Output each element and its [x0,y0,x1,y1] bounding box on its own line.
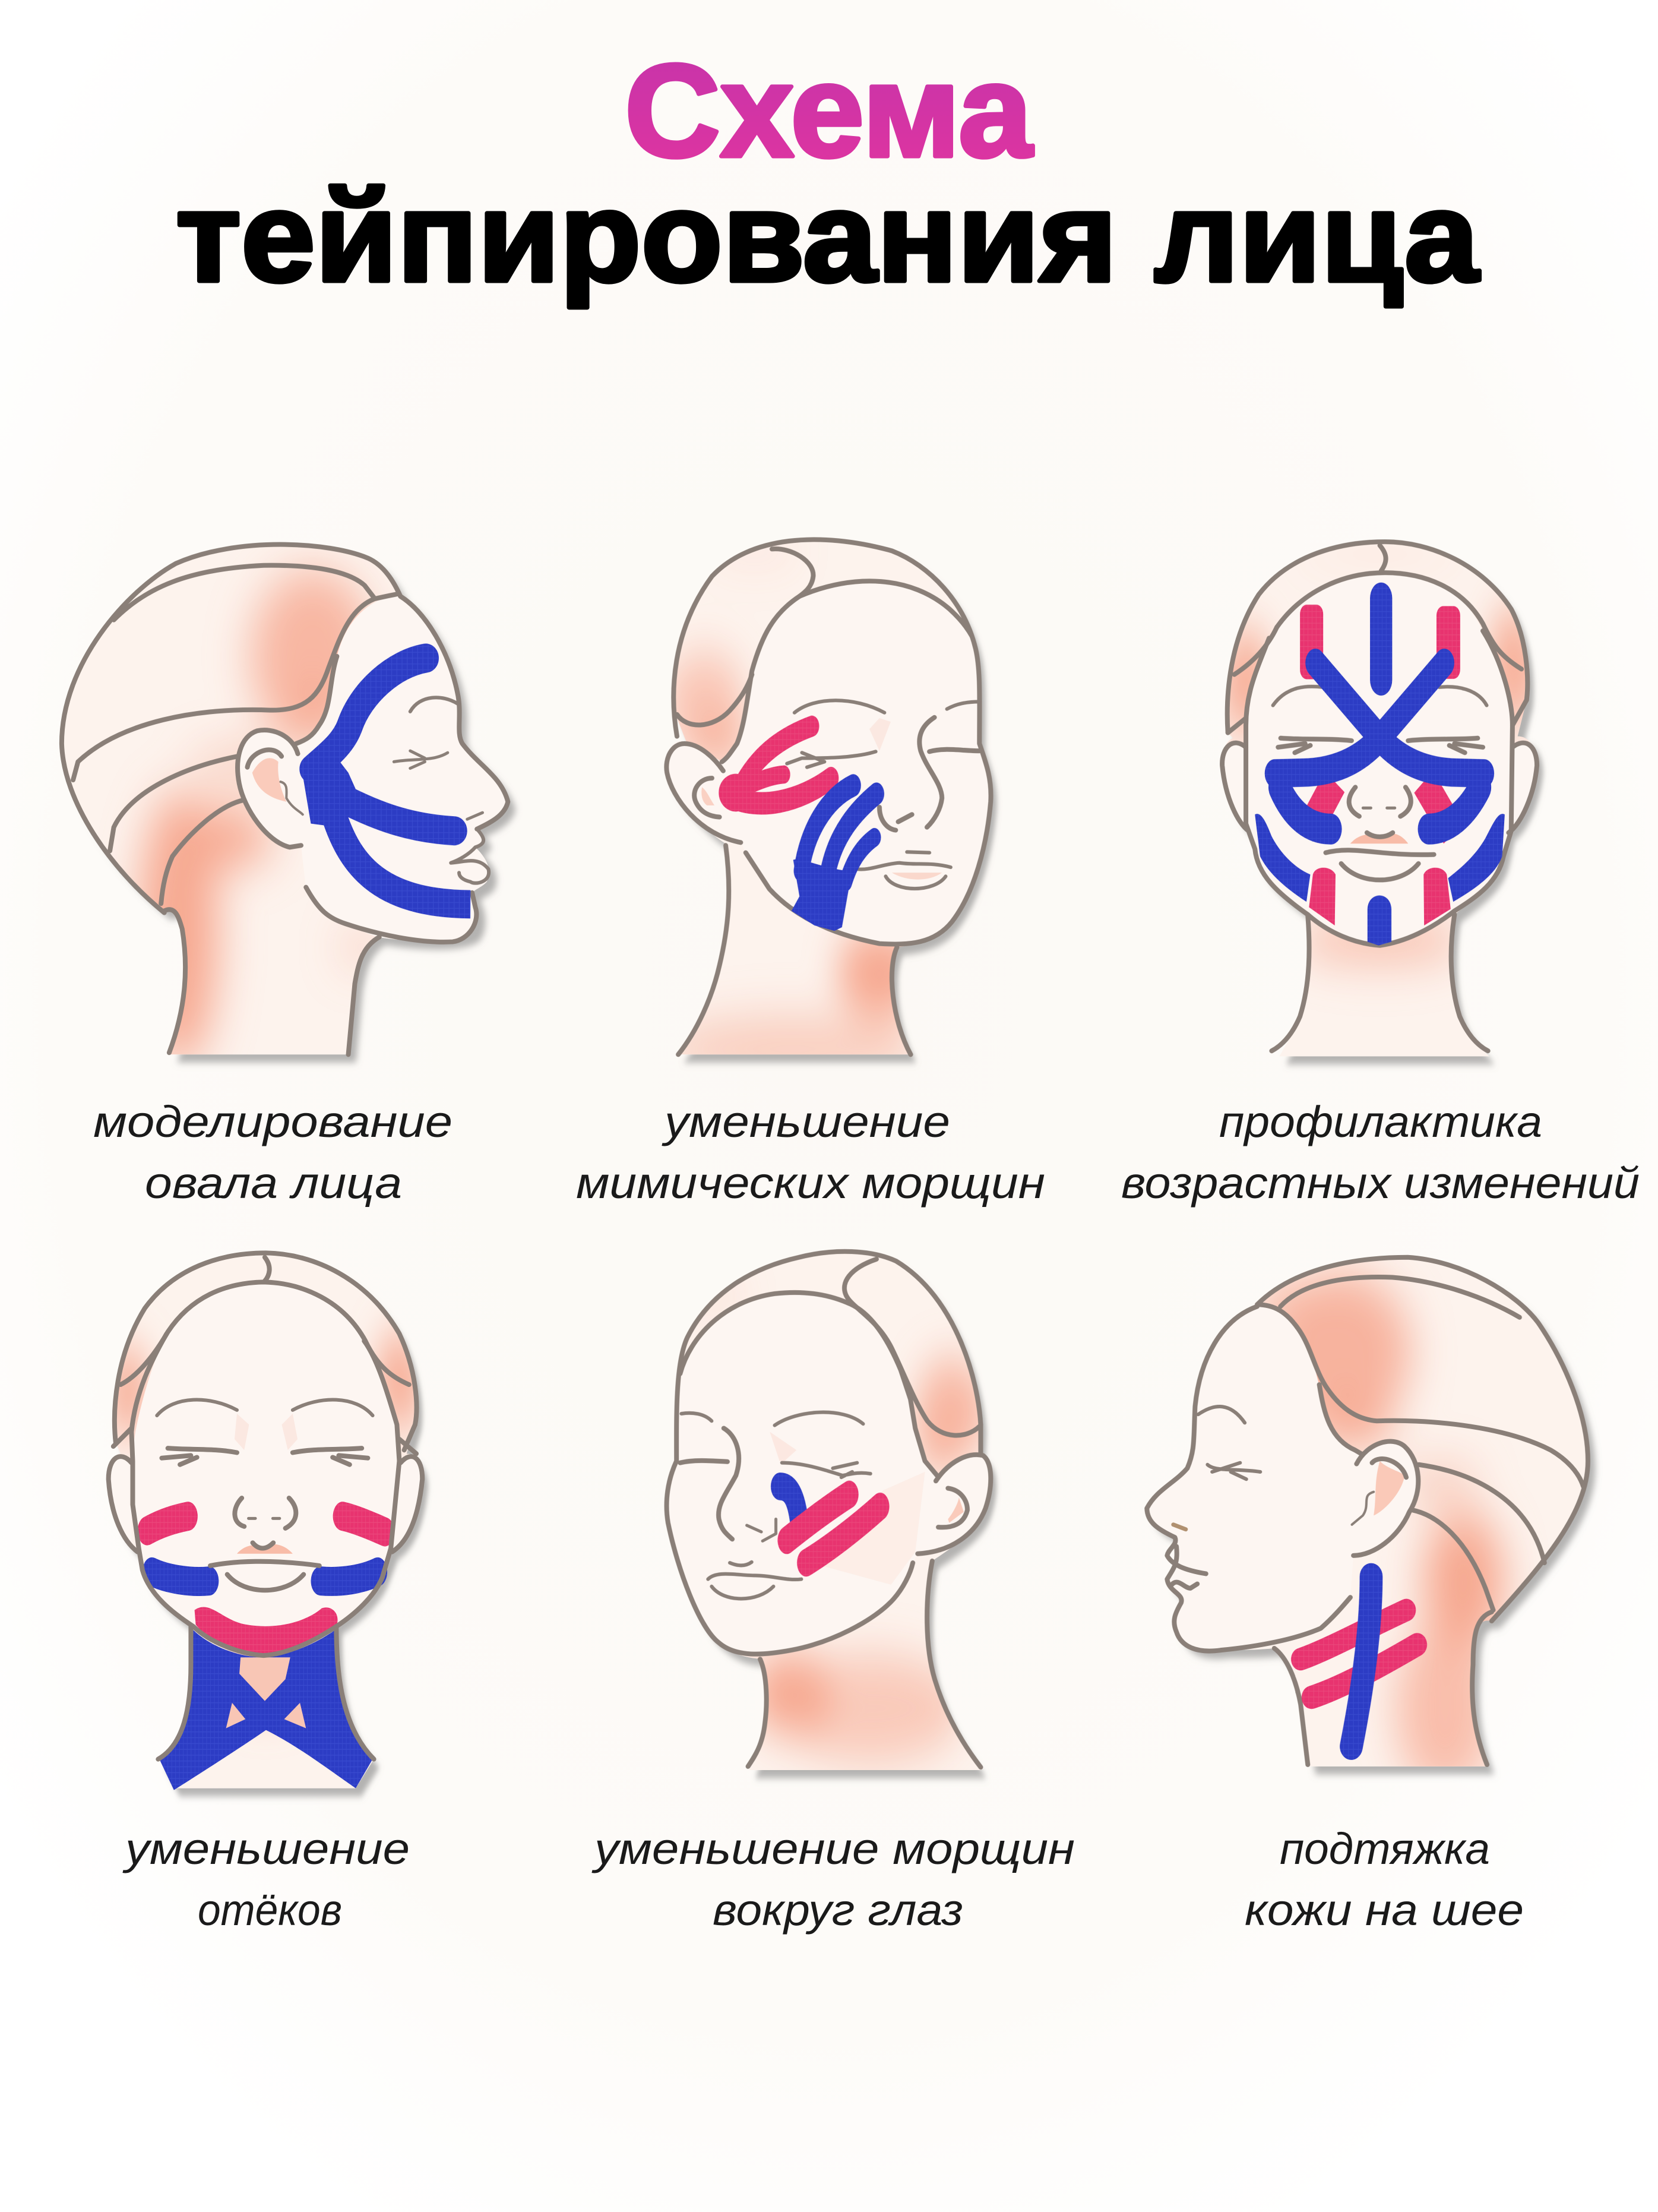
caption: профилактика [1219,1097,1542,1146]
tape: pink [1300,605,1460,925]
outlines [62,545,508,1054]
tape: blue [301,658,470,904]
face [667,1293,991,1654]
head illustration: front face [1220,539,1546,1069]
panel: уменьшение морщин вокруг глаз [591,1252,1075,1935]
heading: тейпирования лица: тейпирования лица [176,165,1480,308]
face [132,1282,399,1655]
skin shading [140,569,381,1067]
silhouette [666,539,991,1054]
head illustration: profile left [1144,1254,1599,1778]
silhouette [667,1252,991,1770]
caption: уменьшение [661,1097,950,1146]
tape: blue [1351,1576,1371,1746]
outlines [1147,1257,1588,1765]
skin shading [662,540,922,1082]
caption [1121,1097,1640,1208]
outlines [109,1253,422,1759]
caption: подтяжка [1280,1824,1490,1873]
silhouette [1147,1257,1588,1767]
heading: Схема: Схема [625,37,1033,185]
caption: отёков [198,1885,342,1935]
caption [1245,1824,1524,1935]
caption: уменьшение [122,1824,410,1873]
skin shading [1249,1272,1504,1796]
head illustration: three-quarter right [664,1249,999,1782]
tape: pink [787,1494,880,1563]
skin shading [1223,547,1537,962]
panel: уменьшение мимических морщин [576,539,1045,1208]
caption: возрастных изменений [1121,1158,1640,1208]
caption: овала лица [145,1158,402,1208]
caption: уменьшение морщин [591,1824,1075,1873]
caption [591,1824,1075,1935]
title [176,37,1480,308]
tape: blue [792,785,877,931]
skin shading [678,1287,988,1763]
caption: мимических морщин [576,1158,1045,1208]
caption [93,1097,453,1208]
face [237,595,508,941]
outlines [666,539,991,1054]
face [1147,1304,1418,1651]
silhouette [1222,542,1537,1056]
head illustration: three-quarter left [664,537,1000,1067]
caption: моделирование [93,1097,453,1146]
caption [122,1824,410,1935]
silhouette [62,545,508,1054]
tape: blue [1255,598,1505,946]
silhouette [109,1253,422,1788]
tape: blue cheeks [152,1572,378,1581]
outlines [667,1252,991,1767]
caption: кожи на шее [1245,1885,1524,1935]
skin shading [109,1330,421,1705]
tape: pink [719,726,831,811]
panel: уменьшение отёков [109,1253,422,1935]
panel: профилактика возрастных изменений [1121,542,1640,1208]
head illustration: front face with neck [106,1250,431,1800]
face [1246,573,1513,946]
caption [576,1097,1045,1208]
tape: blue [780,1486,799,1519]
caption: вокруг глаз [713,1885,963,1935]
panel: моделирование овала лица [62,545,508,1208]
tape: pink [147,1516,385,1654]
tape: blue neck [159,1630,373,1790]
head illustration: profile right [59,542,519,1067]
outlines [1222,542,1537,1051]
panel: подтяжка кожи на шее [1147,1257,1588,1935]
tape: pink [1301,1610,1417,1698]
face [666,581,991,944]
